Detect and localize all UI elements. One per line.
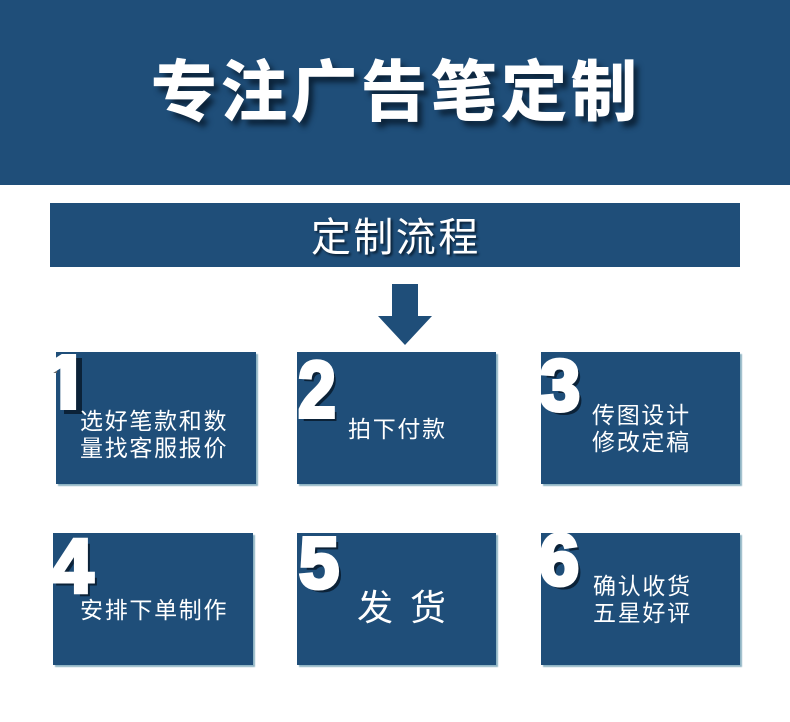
panel: step 1 (56, 352, 256, 484)
step number 3: 3 (540, 346, 580, 426)
section heading text: 定制流程 (311, 216, 481, 260)
step 1 text: 量找客服报价 (80, 435, 228, 461)
step 3 text (592, 402, 691, 455)
step 2 text: 拍下付款 (348, 416, 447, 442)
step 6 text: 确认收货 (593, 573, 692, 599)
title banner (0, 0, 790, 185)
panel: step 5 (297, 533, 496, 665)
title: 专注广告笔定制 (151, 55, 641, 129)
panel: step 4 (53, 533, 253, 665)
step 6 text: 五星好评 (593, 600, 692, 626)
step number 1: 1 (38, 334, 94, 446)
panel: step 2 (297, 352, 496, 484)
arrow: down (378, 284, 432, 345)
step number 4: 4 (51, 524, 93, 609)
panel: step 6 (541, 533, 740, 665)
section heading bar (50, 203, 740, 267)
step number 6: 6 (539, 521, 579, 601)
step 5 text: 发 货 (357, 587, 446, 628)
step 3 text: 传图设计 (592, 402, 691, 428)
panel: step 3 (541, 352, 740, 484)
step number 2: 2 (298, 345, 336, 434)
step number 1 (53, 354, 82, 414)
step 1 text (80, 408, 228, 461)
step 4 text: 安排下单制作 (80, 597, 228, 623)
step 6 text (593, 573, 692, 626)
step 1 text: 选好笔款和数 (80, 408, 228, 434)
step 3 text: 修改定稿 (592, 429, 691, 455)
step number 5: 5 (299, 524, 339, 604)
